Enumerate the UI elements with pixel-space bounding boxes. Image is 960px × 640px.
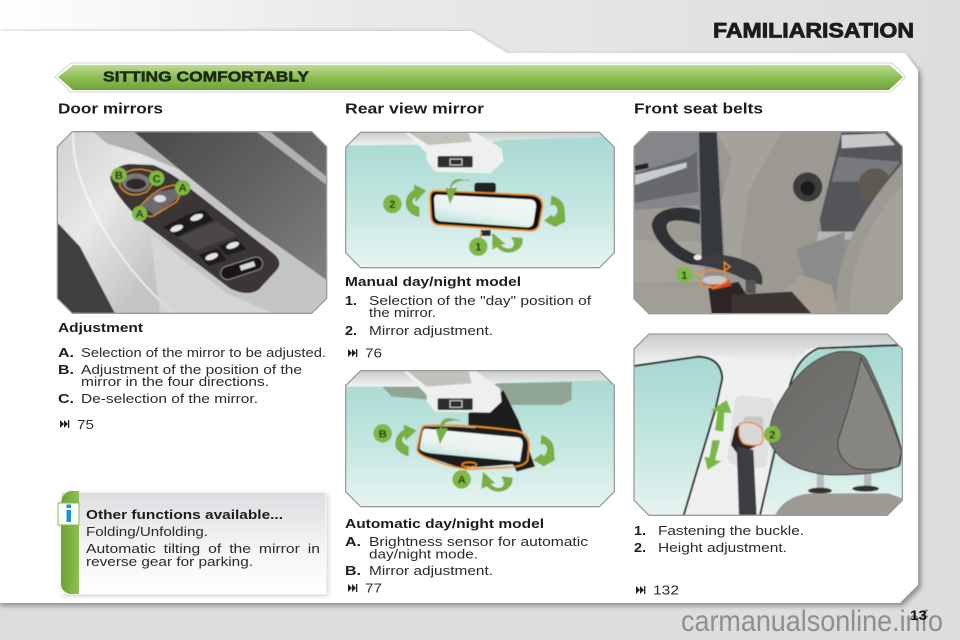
info box: other functions: reverse gear for parking. bbox=[86, 554, 253, 569]
callouts 1 and 2: 2 bbox=[389, 199, 395, 211]
text block: manual day/night model: 1. bbox=[345, 293, 357, 308]
callout 2 bbox=[764, 426, 781, 443]
callouts A and B bbox=[374, 424, 471, 488]
info box: other functions: Folding/Unfolding. bbox=[86, 524, 208, 539]
illustration: seat belt height adjuster bbox=[634, 334, 902, 515]
page reference 132 bbox=[636, 582, 679, 598]
page reference 77 bbox=[348, 580, 382, 596]
text block: adjustment: Selection of the mirror to be adjusted. bbox=[81, 345, 326, 360]
text block: automatic day/night model: day/night mode. bbox=[369, 546, 478, 562]
banner heading: SITTING COMFORTABLY bbox=[103, 68, 309, 86]
page reference 77: 77 bbox=[365, 580, 382, 596]
text block: seat belt steps: 1. bbox=[634, 523, 646, 538]
text block: automatic day/night model: B. bbox=[345, 563, 361, 578]
illustration: rear view mirror, automatic bbox=[346, 371, 614, 507]
info box: other functions: Automatic tilting of the mirror in bbox=[86, 541, 320, 556]
callout labels: B bbox=[115, 170, 123, 182]
text block: automatic day/night model: A. bbox=[345, 534, 361, 549]
callouts 1 and 2 bbox=[383, 195, 487, 256]
info box: other functions: Other functions available... bbox=[86, 507, 283, 522]
callout labels bbox=[111, 167, 190, 221]
page number: 13 bbox=[910, 607, 927, 623]
callouts A and B: A bbox=[458, 474, 466, 486]
text block: automatic day/night model: Automatic day/night model bbox=[345, 516, 544, 531]
text block: adjustment: Adjustment bbox=[58, 320, 144, 335]
text block: automatic day/night model bbox=[345, 516, 589, 578]
text block: manual day/night model bbox=[345, 274, 591, 338]
text block: adjustment: B. bbox=[58, 362, 74, 377]
page reference 132: 132 bbox=[653, 582, 679, 598]
icon: information bbox=[58, 503, 79, 525]
text block: automatic day/night model: Mirror adjustment. bbox=[369, 563, 493, 578]
text block: manual day/night model: the mirror. bbox=[369, 305, 436, 320]
text block: seat belt steps: Fastening the buckle. bbox=[658, 523, 804, 538]
page reference 75: 75 bbox=[77, 417, 94, 432]
text block: seat belt steps: 2. bbox=[634, 540, 646, 555]
text block: adjustment: mirror in the four directions. bbox=[81, 374, 269, 389]
header title: FAMILIARISATION bbox=[713, 20, 914, 42]
text block: adjustment: De-selection of the mirror. bbox=[81, 391, 258, 406]
page reference 75 bbox=[60, 417, 94, 432]
heading: front seat belts: Front seat belts bbox=[634, 102, 763, 118]
heading: door mirrors: Door mirrors bbox=[58, 102, 163, 118]
text block: adjustment: C. bbox=[58, 391, 74, 406]
callout 1 bbox=[676, 267, 692, 283]
callout labels: A bbox=[136, 209, 144, 221]
illustration: seat belt buckle bbox=[634, 132, 902, 314]
text block: adjustment: Adjustment of the position of the bbox=[81, 362, 302, 377]
callouts 1 and 2: 1 bbox=[475, 242, 481, 254]
callout 1: 1 bbox=[681, 270, 687, 282]
text block: manual day/night model: Mirror adjustment. bbox=[369, 323, 493, 338]
text block: seat belt steps bbox=[634, 523, 804, 555]
heading: rear view mirror: Rear view mirror bbox=[345, 102, 484, 118]
section banner bbox=[55, 63, 906, 92]
illustration: door window controls bbox=[57, 132, 327, 313]
info box: other functions bbox=[58, 491, 328, 596]
rotation arrows bbox=[396, 419, 554, 491]
text block: manual day/night model: Manual day/night model bbox=[345, 274, 521, 289]
callout labels: A bbox=[179, 183, 187, 195]
text block: adjustment bbox=[58, 320, 326, 406]
callout 2: 2 bbox=[769, 429, 775, 441]
text block: automatic day/night model: Brightness sensor for automatic bbox=[369, 534, 589, 549]
page reference 76: 76 bbox=[365, 346, 382, 360]
illustration: rear view mirror, manual bbox=[346, 132, 614, 268]
text block: adjustment: A. bbox=[58, 345, 74, 360]
text block: manual day/night model: Selection of the "day" position of bbox=[369, 293, 591, 308]
rotation arrows bbox=[406, 179, 565, 252]
callouts A and B: B bbox=[379, 428, 387, 440]
text block: seat belt steps: Height adjustment. bbox=[658, 540, 787, 555]
text block: manual day/night model: 2. bbox=[345, 323, 357, 338]
callout labels: C bbox=[153, 173, 161, 185]
page reference 76 bbox=[348, 346, 382, 360]
